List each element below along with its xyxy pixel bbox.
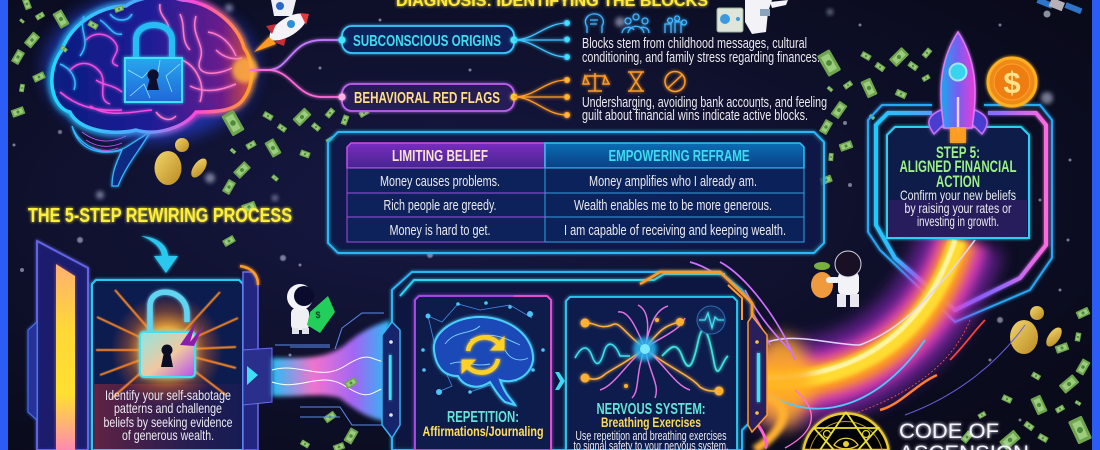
icons: red flags <box>583 72 685 92</box>
table body: Money causes problems. <box>380 174 500 190</box>
step 5 body: investing in growth. <box>917 213 999 229</box>
step 5 shield frame <box>868 105 1052 322</box>
step 1 text: beliefs by seeking evidence <box>104 414 233 430</box>
brand name <box>899 420 1029 450</box>
rocket <box>929 32 987 143</box>
nervous system body: Use repetition and breathing exercises <box>576 429 726 443</box>
padlock <box>125 25 182 102</box>
brain stem and cerebellum <box>72 126 150 186</box>
nervous system title: NERVOUS SYSTEM: <box>596 401 706 418</box>
text: red flags: guilt about financial wins indicate active blocks. <box>582 108 808 124</box>
step 5 body: by raising your rates or <box>904 200 1012 216</box>
step 5 heading: STEP 5: <box>936 144 980 162</box>
step 1 text: patterns and challenge <box>114 400 222 416</box>
inner panel <box>887 127 1029 238</box>
empowering reframe header: EMPOWERING REFRAME <box>608 148 750 165</box>
pill: subconscious origins <box>338 26 518 53</box>
pulse badge <box>697 306 725 334</box>
limiting belief header <box>347 143 545 168</box>
down arrow <box>141 236 178 273</box>
step 1 left door <box>28 241 88 450</box>
table body <box>347 168 804 242</box>
network brain <box>421 301 545 405</box>
nervous system body <box>574 429 728 450</box>
text: red flags: Undersharging, avoiding bank accounts, and feeling <box>582 95 827 111</box>
dollar coin <box>988 58 1036 106</box>
sync icon <box>462 337 504 373</box>
panel tint <box>889 200 1027 237</box>
step 5 body <box>900 187 1016 229</box>
nervous system title: Breathing Exercises <box>601 414 701 430</box>
text: origins <box>582 36 820 66</box>
astronaut with safe <box>717 0 788 34</box>
text: origins: conditioning, and family stress regarding finances. <box>582 50 820 66</box>
step 5 heading: ALIGNED FINANCIAL <box>900 158 1016 176</box>
table body: I am capable of receiving and keeping wealth. <box>564 223 786 239</box>
logo emblem <box>804 412 888 450</box>
step 1 text: Identify your self-sabotage <box>105 387 231 403</box>
heading: 5-step process: THE 5-STEP REWIRING PROCESS <box>28 205 292 227</box>
energy flow between panels <box>272 313 390 425</box>
table frame <box>328 132 824 253</box>
repetition title: Affirmations/Journaling <box>422 423 544 439</box>
step 5 panel <box>887 32 1036 238</box>
step 1 text <box>104 387 233 443</box>
brain with lock <box>44 0 258 186</box>
hot spot <box>232 57 258 83</box>
limiting belief header: LIMITING BELIEF <box>392 148 488 165</box>
icons: origins <box>585 14 687 33</box>
repetition panel <box>415 296 551 450</box>
step 1 text: of generous wealth. <box>122 427 214 443</box>
neuron <box>575 305 728 398</box>
table body: Money amplifies who I already am. <box>589 174 757 190</box>
arrow between panels <box>555 372 565 390</box>
satellite <box>1036 0 1082 18</box>
energy stream to step 5 <box>690 240 1025 450</box>
coin group left <box>154 138 210 185</box>
brand name: CODE OF <box>899 420 999 443</box>
broken lock burst <box>96 290 238 406</box>
nervous system panel <box>566 297 737 450</box>
right pod <box>748 316 767 432</box>
table body: Money is hard to get. <box>390 223 490 239</box>
table body: Wealth enables me to be more generous. <box>574 198 772 214</box>
step 5 body: Confirm your new beliefs <box>900 187 1016 203</box>
rocket astronaut <box>254 0 311 52</box>
repetition title: REPETITION: <box>447 409 519 426</box>
coin group right <box>1010 306 1065 354</box>
astronaut with cash <box>287 284 335 334</box>
repetition title <box>422 409 544 439</box>
brain glow <box>44 0 256 142</box>
pill: behavioral red flags: BEHAVIORAL RED FLAGS <box>354 90 500 107</box>
pill: subconscious origins: SUBCONSCIOUS ORIGINS <box>353 33 501 50</box>
nervous system title <box>596 401 706 430</box>
text: red flags <box>582 95 827 124</box>
left pod <box>382 322 400 438</box>
text: origins: Blocks stem from childhood messages, cultural <box>582 36 807 52</box>
orange branches <box>514 78 570 118</box>
empowering reframe header <box>545 143 804 168</box>
brain folds <box>60 4 242 119</box>
step 5 heading <box>900 144 1016 191</box>
connector lines from brain to pills <box>250 40 342 97</box>
step 5 heading: ACTION <box>936 173 980 191</box>
step 1 panel <box>92 266 272 450</box>
middle frame <box>382 272 767 450</box>
astronaut with money bag <box>811 251 861 307</box>
table body: Rich people are greedy. <box>384 198 496 214</box>
cyan branches <box>514 20 570 60</box>
brain outline <box>52 0 252 132</box>
dollar coin: $ <box>1003 65 1021 100</box>
pill: behavioral red flags <box>338 84 518 111</box>
astronaut with cash: $ <box>315 310 321 320</box>
